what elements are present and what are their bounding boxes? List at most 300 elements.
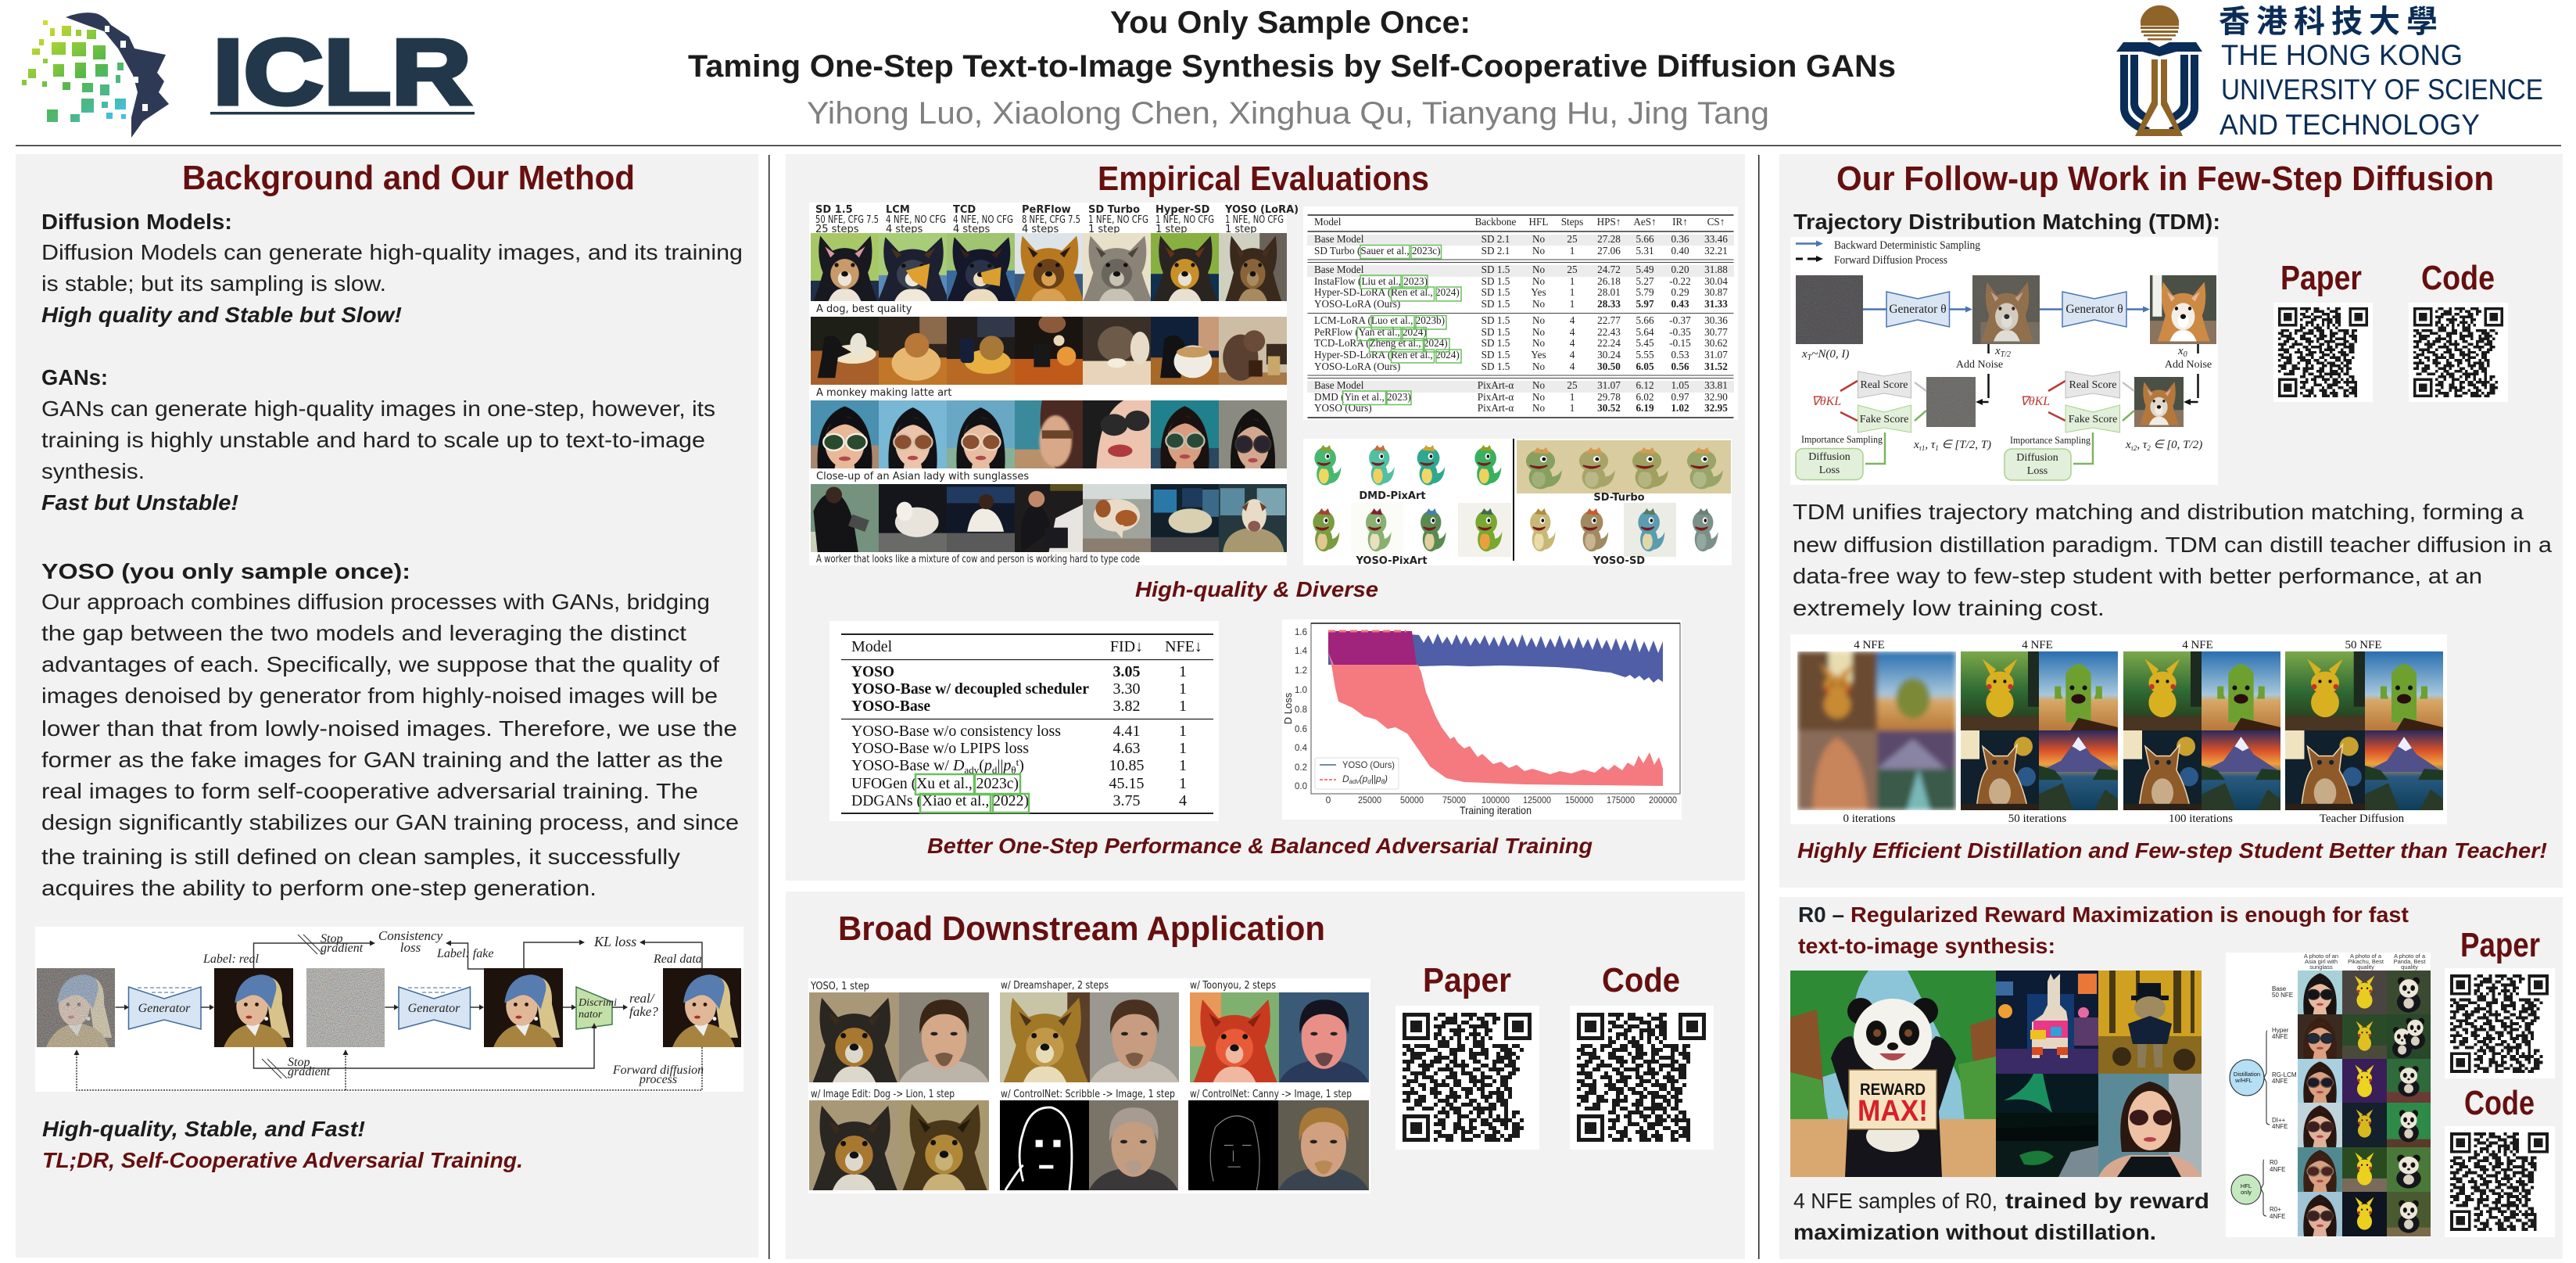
table: one-step benchmark scores: 25 <box>1567 264 1578 275</box>
row labels: Base <box>2272 985 2287 992</box>
column headers: 4 NFE, NO CFG <box>953 214 1013 226</box>
sample images <box>2298 971 2342 1014</box>
labels: T <box>1807 353 1813 362</box>
x axis ticks: 0 <box>1326 795 1331 806</box>
table: one-step benchmark scores: Steps <box>1561 216 1583 228</box>
table: one-step benchmark scores: 32.90 <box>1704 391 1728 403</box>
y axis ticks: 0.6 <box>1295 723 1307 734</box>
logo wordmark: HKUST: THE HONG KONG <box>2221 39 2463 71</box>
column headers: 4 steps <box>1022 224 1059 235</box>
table: one-step benchmark scores: 6.12 <box>1636 379 1654 391</box>
legend: ) <box>1383 773 1388 784</box>
table: one-step benchmark scores: Hyper-SD-LoRA (Ren et al., 2024) <box>1314 286 1460 298</box>
text block: YOSO: advantages of each. Specifically, we suppose that the quality of <box>41 652 719 676</box>
legend: YOSO (Ours) <box>1342 759 1395 770</box>
table: one-step benchmark scores: 5.49 <box>1636 264 1654 275</box>
title: You Only Sample Once: <box>1110 5 1471 40</box>
diffusion loss boxes <box>1796 449 2071 480</box>
text block: R0 description: maximization without distillation. <box>1793 1220 2156 1244</box>
logo wordmark: ICLR: ICLR <box>213 20 471 124</box>
figure: TDM training progress: 50 iterations <box>2008 813 2066 825</box>
table: one-step benchmark scores: 5.27 <box>1636 275 1654 287</box>
diagram labels: KL loss <box>593 934 636 949</box>
table: FID comparison: YOSO-Base w/o consistency loss <box>851 723 1061 740</box>
x axis ticks: 200000 <box>1649 795 1677 806</box>
table: one-step benchmark scores: 1.05 <box>1671 379 1689 391</box>
table: one-step benchmark scores: No <box>1532 245 1545 257</box>
text block: GANs <box>41 365 715 515</box>
table: one-step benchmark scores: 5.79 <box>1636 286 1654 298</box>
labels: x <box>2178 345 2184 357</box>
images <box>1796 275 1863 344</box>
heading: follow-up work: Our Follow-up Work in Few-Step Diffusion <box>1836 160 2494 198</box>
noise image <box>306 968 385 1047</box>
table: FID comparison: || <box>997 757 1003 774</box>
table: FID comparison: YOSO-Base <box>851 698 930 715</box>
clouds and brackets: HFL <box>2241 1182 2252 1189</box>
column prompts: quality <box>2401 963 2418 971</box>
table: FID comparison: 1 <box>1179 663 1187 680</box>
legend: θ <box>1381 778 1385 785</box>
clouds and brackets <box>2230 1031 2270 1216</box>
row labels: Hyper <box>2272 1027 2289 1034</box>
figure: TDM training progress: 4 NFE <box>2022 639 2053 651</box>
table: FID comparison: YOSO-Base w/ decoupled scheduler <box>851 680 1089 698</box>
text block: TDM description: new diffusion distillation paradigm. TDM can distill teacher diffusion in a <box>1793 533 2553 557</box>
clouds and brackets: Distillation <box>2234 1071 2260 1078</box>
table: one-step benchmark scores: 32.21 <box>1704 245 1728 257</box>
table: one-step benchmark scores: 24.72 <box>1597 264 1621 275</box>
text block: R0 description: trained by reward <box>2005 1189 2209 1213</box>
labels: Loss <box>2027 465 2048 477</box>
table: FID comparison: NFE↓ <box>1165 638 1202 655</box>
table: one-step benchmark scores: -0.37 <box>1669 314 1691 326</box>
table: FID comparison: 3.05 <box>1113 663 1140 680</box>
row labels: 50 NFE <box>2272 992 2293 999</box>
callout: high-quality and diverse: High-quality & Diverse <box>1135 577 1378 601</box>
text block: TDM description: extremely low training cost. <box>1793 596 2105 620</box>
table: one-step benchmark scores: 0.43 <box>1671 298 1689 310</box>
table: one-step benchmark scores: 31.07 <box>1597 379 1621 391</box>
diagram labels: Label: real <box>202 953 260 966</box>
table: one-step benchmark scores: 5.66 <box>1636 314 1654 326</box>
table: one-step benchmark scores: SD 1.5 <box>1481 298 1510 310</box>
column headers: TCD <box>953 204 976 216</box>
table: one-step benchmark scores: SD 1.5 <box>1481 349 1510 361</box>
text block: diffusion models: High quality and Stable but Slow! <box>41 303 402 327</box>
series: YOSO (Ours) <box>1328 632 1663 683</box>
table: one-step benchmark scores: 33.81 <box>1704 379 1728 391</box>
figure: TDM training progress <box>1790 634 2447 825</box>
figure: downstream samples: YOSO, 1 step <box>810 981 869 992</box>
labels: Diffusion <box>2016 452 2058 464</box>
row: monkey <box>811 314 1287 399</box>
image: aurora <box>1996 1074 2098 1177</box>
table: FID comparison: adv <box>964 764 980 776</box>
table: one-step benchmark scores: Yes <box>1531 286 1546 298</box>
column: 50 iterations <box>1961 651 2118 810</box>
table: one-step benchmark scores: 0.36 <box>1671 233 1689 245</box>
table: one-step benchmark scores: 31.07 <box>1704 349 1728 361</box>
figure: one-step sample comparison grid <box>809 203 1299 565</box>
column headers: 1 step <box>1088 224 1120 235</box>
text block: TDM description <box>1793 500 2553 620</box>
x axis ticks: 25000 <box>1358 795 1381 806</box>
table: one-step benchmark scores: 4 <box>1570 326 1575 338</box>
y axis ticks: 1.6 <box>1295 626 1307 637</box>
text block: diffusion models: Diffusion Models: <box>41 210 232 234</box>
table: one-step benchmark scores: CS↑ <box>1707 216 1725 228</box>
column headers: 1 step <box>1155 224 1188 235</box>
table: one-step benchmark scores: SD 1.5 <box>1481 314 1510 326</box>
labels: ∇θKL <box>2020 395 2050 408</box>
labels: x <box>1802 348 1807 361</box>
authors: Yihong Luo, Xiaolong Chen, Xinghua Qu, Tianyang Hu, Jing Tang <box>807 96 1769 131</box>
title: Taming One-Step Text-to-Image Synthesis by Self-Cooperative Diffusion GANs <box>688 49 1896 84</box>
image: cat in hat <box>2098 971 2202 1074</box>
x axis ticks: 125000 <box>1523 795 1551 806</box>
label: R0 paper: Paper <box>2460 926 2540 964</box>
table: one-step benchmark scores: 4 <box>1570 349 1575 361</box>
figure: TDM training progress: Teacher Diffusion <box>2320 813 2405 825</box>
x axis ticks: 175000 <box>1607 795 1635 806</box>
text block: GANs: GANs can generate high-quality images in one-step, however, its <box>41 396 715 421</box>
labels: , τ <box>2137 439 2148 451</box>
table: one-step benchmark scores: 4 <box>1570 337 1575 349</box>
text block: diffusion models: is stable; but its sampling is slow. <box>41 271 386 296</box>
panel: follow-up work <box>1779 154 2563 888</box>
diagram: TDM: Generator θ <box>2065 303 2123 316</box>
table: one-step benchmark scores: Base Model <box>1314 379 1364 391</box>
column: teacher diffusion <box>2285 651 2443 810</box>
column headers: Hyper-SD <box>1155 204 1210 216</box>
logo wordmark: HKUST: UNIVERSITY OF SCIENCE <box>2221 74 2543 106</box>
table: one-step benchmark scores: SD 2.1 <box>1481 233 1510 245</box>
labels: 1 <box>1935 444 1939 452</box>
table: one-step benchmark scores: 22.24 <box>1597 337 1621 349</box>
heading: R0: R0 – <box>1798 902 1844 927</box>
table: one-step benchmark scores: No <box>1532 275 1545 287</box>
table: one-step benchmark scores <box>1303 206 1738 420</box>
text block: YOSO: Our approach combines diffusion processes with GANs, bridging <box>41 590 710 614</box>
clouds and brackets: w/HFL <box>2234 1077 2252 1084</box>
table: one-step benchmark scores: 32.95 <box>1704 402 1728 414</box>
subheading: TDM: Trajectory Distribution Matching (TDM): <box>1793 210 2220 234</box>
table: one-step benchmark scores: 30.36 <box>1704 314 1728 326</box>
table: one-step benchmark scores: SD 1.5 <box>1481 264 1510 275</box>
figure: dinosaur diversity samples: DMD-PixArt <box>1359 490 1426 502</box>
labels: 0 <box>2184 350 2187 359</box>
column headers: 1 NFE, NO CFG <box>1155 214 1214 226</box>
y axis ticks: 0.4 <box>1295 742 1307 753</box>
table: FID comparison: θ <box>1011 764 1016 776</box>
table: FID comparison: p <box>983 757 992 774</box>
figure: TDM training progress: 100 iterations <box>2169 813 2233 825</box>
table: one-step benchmark scores: No <box>1532 264 1545 275</box>
heading: R0: text-to-image synthesis: <box>1798 934 2055 958</box>
table: one-step benchmark scores: 30.52 <box>1597 402 1621 414</box>
table: one-step benchmark scores: 1 <box>1570 391 1575 403</box>
table: one-step benchmark scores: 5.64 <box>1636 326 1654 338</box>
table: one-step benchmark scores: 5.97 <box>1636 298 1654 310</box>
labels: T/2 <box>2001 350 2011 359</box>
table: one-step benchmark scores: 26.18 <box>1597 275 1621 287</box>
column headers: 4 steps <box>886 224 923 235</box>
text block: TDM description: TDM unifies trajectory matching and distribution matching, forming a <box>1793 500 2524 524</box>
QR code: TDM paper <box>2273 303 2373 402</box>
table: one-step benchmark scores: No <box>1532 361 1545 372</box>
table: FID comparison: 4.41 <box>1113 723 1140 740</box>
chart: discriminator loss over training iterations <box>1282 619 1682 820</box>
table: one-step benchmark scores: 28.33 <box>1597 298 1621 310</box>
table: one-step benchmark scores: 22.43 <box>1597 326 1621 338</box>
table: one-step benchmark scores: SD 1.5 <box>1481 286 1510 298</box>
table: FID comparison: ( <box>979 757 984 774</box>
figure: downstream samples: w/ ControlNet: Canny -> Image, 1 step <box>1190 1089 1352 1100</box>
figure: TDM training progress: 4 NFE <box>2182 639 2213 651</box>
panel: R0 <box>1779 897 2563 1259</box>
table: one-step benchmark scores: 0.29 <box>1671 286 1689 298</box>
table: one-step benchmark scores: 6.02 <box>1636 391 1654 403</box>
table: FID comparison <box>829 621 1219 821</box>
chart: discriminator loss over training iterations: D Loss <box>1282 692 1294 724</box>
text block: YOSO <box>41 559 739 900</box>
figure: dinosaur diversity samples <box>1303 439 1732 567</box>
heading: R0 <box>1798 902 2409 958</box>
labels: Importance Sampling <box>1801 434 1883 445</box>
y axis ticks: 0.8 <box>1295 704 1307 715</box>
row labels: R0+ <box>2270 1206 2281 1213</box>
row labels: 4NFE <box>2272 1123 2288 1130</box>
generators <box>1886 292 1950 327</box>
clean image <box>214 968 293 1047</box>
legend: Forward Diffusion Process <box>1834 254 1947 267</box>
score networks <box>1858 371 2120 432</box>
text block: YOSO: the gap between the two models and leveraging the distinct <box>41 621 686 645</box>
table: one-step benchmark scores: 31.33 <box>1704 298 1728 310</box>
table: FID comparison: 1 <box>1179 757 1187 774</box>
table: one-step benchmark scores: 5.31 <box>1636 245 1654 257</box>
label: R0 code: Code <box>2464 1084 2535 1122</box>
table: one-step benchmark scores: 5.66 <box>1636 233 1654 245</box>
column prompts: sunglass <box>2309 963 2333 971</box>
column headers: 25 steps <box>815 224 859 235</box>
table: one-step benchmark scores: 27.28 <box>1597 233 1621 245</box>
table: one-step benchmark scores: Base Model <box>1314 233 1364 245</box>
row labels <box>2270 985 2297 1220</box>
table: one-step benchmark scores: 30.04 <box>1704 275 1728 287</box>
labels: Add Noise <box>1956 359 2003 371</box>
QR code: TDM code <box>2409 303 2508 402</box>
row labels: R0 <box>2270 1159 2278 1166</box>
table: FID comparison: 4 <box>1179 792 1187 809</box>
generators: Generator θ <box>1889 303 1947 316</box>
table: one-step benchmark scores: 25 <box>1567 379 1578 391</box>
diagram labels: loss <box>400 940 421 955</box>
row: lady with sunglasses: Close-up of an Asian lady with sunglasses <box>816 471 1029 483</box>
panel: background and our method <box>16 154 758 1258</box>
table: FID comparison: UFOGen (Xu et al., 2023c) <box>851 775 1019 792</box>
column prompts: A photo of a <box>2394 953 2426 960</box>
legend: ||p <box>1371 773 1381 784</box>
column headers: 1 NFE, NO CFG <box>1225 214 1284 226</box>
row: monkey: A monkey making latte art <box>816 387 951 399</box>
table: one-step benchmark scores: AeS↑ <box>1633 216 1657 228</box>
column headers: 1 NFE, NO CFG <box>1088 214 1148 226</box>
row: lady with sunglasses <box>811 400 1287 483</box>
arrows <box>1863 308 2144 310</box>
column headers: 1 step <box>1225 224 1257 235</box>
diagram labels: Real data <box>653 953 702 966</box>
table: one-step benchmark scores: InstaFlow (Liu et al., 2023) <box>1314 275 1428 287</box>
table: one-step benchmark scores: 0.56 <box>1671 361 1689 372</box>
table: one-step benchmark scores: PixArt-α <box>1478 379 1514 391</box>
row: dog: A dog, best quality <box>816 303 912 315</box>
image: girl with sunglasses <box>2098 1074 2202 1177</box>
column headers: 4 NFE, NO CFG <box>886 214 946 226</box>
table: one-step benchmark scores: 5.55 <box>1636 349 1654 361</box>
figure: TDM training progress: 50 NFE <box>2345 639 2382 651</box>
table: FID comparison: 4.63 <box>1113 740 1140 757</box>
table: one-step benchmark scores: 22.77 <box>1597 314 1621 326</box>
table: one-step benchmark scores: Yes <box>1531 349 1546 361</box>
table: one-step benchmark scores: IR↑ <box>1672 216 1688 228</box>
column: 0 iterations <box>1797 651 1956 810</box>
figure: downstream samples: w/ ControlNet: Scribble -> Image, 1 step <box>1001 1089 1175 1100</box>
discriminator <box>576 987 617 1029</box>
generator 2 <box>399 987 471 1029</box>
labels: , τ <box>1925 439 1936 451</box>
label: paper: Paper <box>1423 961 1511 999</box>
column headers: PeRFlow <box>1022 204 1071 216</box>
heading: R0: Regularized Reward Maximization is enough for fast <box>1850 902 2409 927</box>
labels: τ2 <box>2131 444 2137 452</box>
diagram labels: real/ <box>629 991 656 1006</box>
callout: better one-step performance: Better One-Step Performance & Balanced Adversarial Training <box>927 834 1593 858</box>
diagram labels: Consistency <box>378 928 443 943</box>
table: one-step benchmark scores: 5.45 <box>1636 337 1654 349</box>
row labels: 4NFE <box>2270 1213 2285 1220</box>
y axis ticks: 0.2 <box>1295 762 1307 773</box>
x axis ticks: 75000 <box>1442 795 1466 806</box>
y axis ticks: 1.0 <box>1295 684 1307 695</box>
logo wordmark: HKUST <box>2219 5 2543 141</box>
figure: dinosaur diversity samples: YOSO-PixArt <box>1355 555 1428 567</box>
column prompts: Panda, Best <box>2394 958 2426 965</box>
text block: TDM description: data-free way to few-step student with better performance, at an <box>1793 564 2482 588</box>
column headers: 8 NFE, CFG 7.5 <box>1022 214 1080 226</box>
text block: YOSO: YOSO (you only sample once): <box>41 559 410 583</box>
figure: TDM training progress: 4 NFE <box>1854 639 1885 651</box>
table: one-step benchmark scores: SD 1.5 <box>1481 326 1510 338</box>
table: one-step benchmark scores: -0.15 <box>1669 337 1691 349</box>
labels: x <box>2126 439 2131 451</box>
legend: Backward Deterministic Sampling <box>1834 239 1980 252</box>
QR code: paper <box>1395 1006 1539 1150</box>
icon: ICLR brain logo <box>22 13 169 138</box>
text block: YOSO: lower than that from lowly-noised images. Therefore, we use the <box>41 716 737 741</box>
y axis ticks <box>1295 626 1307 791</box>
table: one-step benchmark scores: 30.87 <box>1704 286 1728 298</box>
figure: downstream samples <box>808 978 1370 1193</box>
heading: background and our method: Background and Our Method <box>182 159 635 197</box>
real image <box>663 968 741 1047</box>
row labels: 4NFE <box>2270 1166 2285 1173</box>
table: one-step benchmark scores: No <box>1532 391 1545 403</box>
y axis ticks: 1.2 <box>1295 665 1307 676</box>
table: FID comparison: 3.30 <box>1113 680 1140 698</box>
legend: (p <box>1360 773 1368 784</box>
labels: ∈ [T/2, T) <box>1939 439 1991 451</box>
logo wordmark: HKUST: 香港科技大學 <box>2219 5 2438 39</box>
text block: GANs: GANs: <box>41 365 108 389</box>
table: one-step benchmark scores: HFL <box>1529 216 1548 228</box>
legend: D <box>1342 773 1349 784</box>
table: FID comparison: t <box>1016 756 1019 768</box>
table: one-step benchmark scores: 29.78 <box>1597 391 1621 403</box>
legend <box>1315 758 1399 789</box>
series: D_adv <box>1328 652 1663 786</box>
x axis ticks: 50000 <box>1400 795 1424 806</box>
table: one-step benchmark scores: Model <box>1314 216 1342 228</box>
labels: Real Score <box>2069 379 2117 391</box>
table: FID comparison: FID↓ <box>1110 638 1143 655</box>
text block: YOSO: the training is still defined on clean samples, it successfully <box>41 845 680 869</box>
text block: GANs: training is highly unstable and hard to scale up to text-to-image <box>41 428 705 452</box>
row: cow-person worker <box>811 484 1287 565</box>
heading: broad downstream application: Broad Downstream Application <box>838 910 1325 948</box>
table: one-step benchmark scores: 4 <box>1570 361 1575 372</box>
table: one-step benchmark scores: No <box>1532 337 1545 349</box>
QR code: code <box>1570 1006 1714 1150</box>
text block: YOSO: images denoised by generator from highly-noised images will be <box>41 684 718 708</box>
diagram labels: Stop <box>321 932 342 945</box>
diagram labels: Forward diffusion <box>612 1064 704 1077</box>
row: cow-person worker: A worker that looks like a mixture of cow and person is working hard to type code <box>816 554 1140 565</box>
figure: dinosaur diversity samples: SD-Turbo <box>1593 492 1645 504</box>
x axis ticks: 100000 <box>1481 795 1510 806</box>
table: one-step benchmark scores: DMD (Yin et al., 2023) <box>1314 391 1411 403</box>
table: FID comparison: YOSO-Base w/o LPIPS loss <box>851 740 1029 757</box>
table: one-step benchmark scores: No <box>1532 233 1545 245</box>
labels: ∈ [0, T/2) <box>2151 439 2202 451</box>
column headers: 4 steps <box>953 224 991 235</box>
text block: R0 description: 4 NFE samples of R0, <box>1793 1189 1997 1213</box>
labels: Fake Score <box>2069 414 2117 425</box>
heading: empirical evaluations: Empirical Evaluations <box>1098 160 1429 198</box>
table: one-step benchmark scores: No <box>1532 326 1545 338</box>
column prompts: quality <box>2357 963 2374 971</box>
label: TDM paper: Paper <box>2280 259 2362 297</box>
column: 100 iterations <box>2123 651 2280 810</box>
table: one-step benchmark scores: 1.02 <box>1671 402 1689 414</box>
table: one-step benchmark scores: 1 <box>1570 298 1575 310</box>
column headers: SD 1.5 <box>815 204 853 216</box>
callout: high-quality, stable, and fast: High-quality, Stable, and Fast! <box>42 1117 365 1141</box>
table: one-step benchmark scores: 27.06 <box>1597 245 1621 257</box>
column prompts: Asia girl with <box>2305 958 2338 965</box>
x axis ticks <box>1326 795 1677 806</box>
generated image <box>484 968 563 1047</box>
text block: GANs: Fast but Unstable! <box>41 490 238 515</box>
column headers: SD Turbo <box>1088 204 1140 216</box>
labels: x <box>1914 439 1919 451</box>
diagram labels: Stop <box>288 1056 310 1069</box>
column prompts: Pikachu, Best <box>2348 958 2384 965</box>
table: FID comparison: ) <box>1019 757 1024 774</box>
text block: diffusion models: Diffusion Models can generate high-quality images, and its training <box>41 240 743 264</box>
generator 1: Generator <box>138 1002 191 1015</box>
